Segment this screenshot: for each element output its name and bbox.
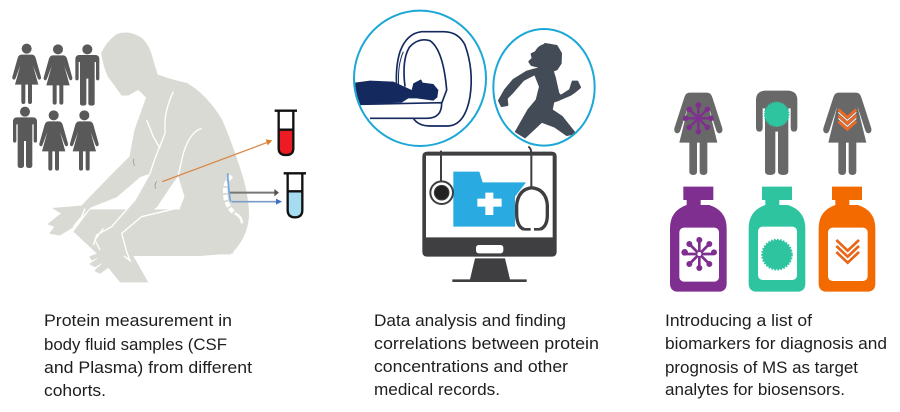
spine: [225, 173, 242, 223]
panel: protein measurement illustration: [12, 33, 306, 282]
green bottle: [749, 187, 805, 292]
text: data analysis caption: concentrations and other: [374, 358, 569, 376]
person icon: [70, 110, 99, 171]
thigh and lower leg: [73, 209, 233, 282]
person icon: [12, 44, 41, 104]
patient silhouette: [355, 79, 438, 104]
icon: red plasma tube: [275, 111, 297, 155]
person icon: [44, 44, 72, 105]
text: data analysis caption: correlations between protein: [374, 335, 599, 353]
panel: biomarkers illustration: [670, 91, 875, 292]
monitor stand: [452, 258, 527, 282]
arrow: spine to CSF tube, blue: [232, 199, 282, 205]
person icon: [13, 107, 37, 168]
head, torso and arms: [48, 33, 248, 273]
text: biomarkers caption: [665, 312, 887, 399]
plus sign: [477, 193, 502, 215]
seated patient silhouette: [48, 33, 248, 282]
scanner and table: [360, 32, 471, 126]
text: protein measurement caption: body fluid samples (CSF: [44, 336, 227, 354]
people group: [12, 44, 99, 171]
text: protein measurement caption: cohorts.: [44, 382, 106, 400]
monitor: [422, 152, 557, 257]
text: protein measurement caption: [44, 312, 252, 400]
purple marker: [684, 103, 713, 133]
patient with green marker: [756, 91, 797, 175]
patient with purple marker: [674, 93, 722, 175]
monitor button: [476, 245, 503, 253]
panel: data analysis illustration: [354, 11, 595, 282]
MRI scan circle: [354, 11, 486, 146]
text: protein measurement caption: Protein measurement in: [44, 312, 232, 330]
text: data analysis caption: Data analysis and finding: [374, 312, 566, 330]
patient with orange marker: [823, 93, 871, 175]
text: data analysis caption: medical records.: [374, 381, 500, 399]
person icon: [39, 110, 68, 171]
text: biomarkers caption: prognosis of MS as target: [665, 359, 858, 377]
icon: blue CSF tube: [284, 173, 306, 217]
text: biomarkers caption: biomarkers for diagnosis and: [665, 335, 887, 353]
text: biomarkers caption: analytes for biosensors.: [665, 381, 845, 399]
computer monitor with medical folder: [422, 147, 557, 282]
white body contour lines: [73, 92, 202, 261]
orange bottle: [819, 187, 875, 292]
person icon: [75, 44, 99, 106]
green marker: [765, 102, 789, 126]
medical folder: [453, 172, 526, 227]
orange marker: [838, 109, 856, 129]
purple bottle: [670, 187, 727, 292]
arrow: blood to plasma tube: [162, 139, 272, 182]
stethoscope: [430, 147, 547, 229]
runner silhouette: [499, 44, 580, 137]
text: protein measurement caption: and Plasma) from different: [44, 359, 252, 377]
arrow: spine to CSF tube, grey: [230, 189, 279, 196]
text: data analysis caption: [374, 312, 599, 399]
runner circle: [493, 29, 595, 146]
text: biomarkers caption: Introducing a list of: [665, 312, 812, 330]
